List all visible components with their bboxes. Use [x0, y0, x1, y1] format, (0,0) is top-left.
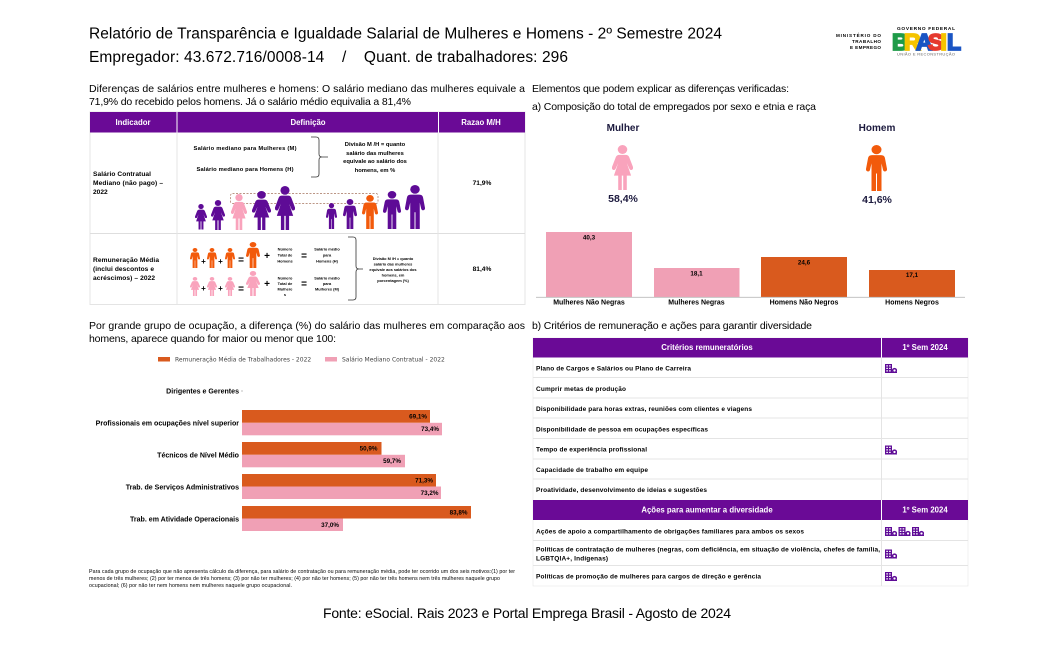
chave e divisão M/H: homens, em — [382, 272, 405, 278]
definição: salário mediano: salário das mulheres — [346, 151, 404, 157]
title: Relatório de Transparência e Igualdade Salarial de Mulheres e Homens - 2º Semestre 2024 — [89, 26, 722, 42]
fórmula: média dos homens: Salário médio — [314, 246, 340, 252]
bar chart: composição por sexo e raça: 40,3 — [583, 234, 596, 242]
fórmula: média dos homens: + — [264, 251, 270, 262]
chave e divisão M/H: salário das mulheres — [374, 262, 412, 266]
rows: critérios — [536, 365, 752, 494]
row label: salário contratual mediano: 2022 — [93, 189, 108, 196]
bars — [242, 410, 471, 531]
logo: ministério e governo federal: S — [928, 29, 943, 55]
text block: diferenças de salários: Diferenças de salários entre mulheres e homens: O salário mediano das mulheres equivale a — [89, 83, 525, 95]
header: ações diversidade: Ações para aumentar a diversidade — [641, 506, 773, 514]
fórmula: média das mulheres — [190, 271, 340, 297]
category labels: Técnicos de Nível Médio — [157, 452, 240, 460]
fórmula: média das mulheres: = — [301, 279, 307, 290]
rows: critérios: Capacidade de trabalho em equipe — [536, 467, 648, 474]
value labels: 73,4% — [421, 426, 439, 433]
rows: critérios: Tempo de experiência profissional — [536, 446, 647, 454]
value labels — [321, 414, 468, 529]
panel: critérios e ações — [533, 338, 968, 586]
table header: Razao M/H — [461, 118, 501, 127]
fórmula: média das mulheres: + — [218, 284, 223, 293]
bar chart: composição por sexo e raça — [536, 232, 965, 306]
rows: critérios: Disponibilidade de pessoa em ocupações específicas — [536, 426, 708, 433]
bar chart: diferença por ocupação — [96, 388, 471, 531]
rows: critérios: Cumprir metas de produção — [536, 386, 626, 393]
row label: remuneração média — [93, 257, 159, 282]
table header: Definição — [290, 118, 326, 127]
logo: ministério e governo federal: MINISTÉRIO DO — [836, 31, 881, 38]
legend: Salário Mediano Contratual - 2022 — [342, 356, 445, 364]
panel: homem 41,6%: 41,6% — [862, 194, 893, 206]
fórmula: média das mulheres: Mulhere — [278, 286, 293, 292]
definição: salário mediano: Salário mediano para Mulheres (M) — [194, 146, 297, 152]
logo: ministério e governo federal: L — [947, 29, 961, 55]
fórmula: média das mulheres: + — [201, 284, 206, 293]
fórmula: média das mulheres: = — [238, 284, 244, 295]
rows: ações: Políticas de promoção de mulheres para cargos de direção e gerência — [536, 574, 761, 580]
panel: mulher 58,4%: Mulher — [607, 123, 639, 134]
rows: critérios: Plano de Cargos e Salários ou Plano de Carreira — [536, 365, 691, 372]
chave e divisão M/H — [348, 237, 417, 300]
text block: diferenças de salários: 71,9% do recebido pelos homens. Já o salário médio equivalia a 81,4% — [89, 96, 411, 108]
fórmula: média dos homens: Homens — [277, 258, 293, 264]
value labels: 69,1% — [409, 414, 427, 420]
definição: salário mediano: Divisão M /H = quanto — [345, 142, 406, 148]
category labels: Profissionais em ocupações nível superior — [96, 420, 239, 428]
fórmula: média das mulheres: + — [264, 279, 270, 290]
value labels: 83,8% — [450, 510, 468, 516]
logo: ministério e governo federal: TRABALHO — [852, 39, 881, 44]
fórmula: média dos homens — [190, 242, 340, 268]
panel: tabela de indicadores — [90, 112, 525, 304]
rows: ações — [536, 528, 880, 580]
logo: ministério e governo federal: E EMPREGO — [850, 45, 881, 50]
logo: ministério e governo federal: R — [904, 29, 921, 55]
header: ações diversidade — [533, 500, 968, 520]
rows: critérios: Disponibilidade para horas extras, reuniões com clientes e viagens — [536, 406, 752, 413]
text block: elementos explicativos: a) Composição do total de empregados por sexo e etnia e raça — [532, 101, 816, 113]
rows: ações: Políticas de contratação de mulheres (negras, com deficiência, em situação de violência, chefes de família, — [536, 546, 880, 554]
bar chart: composição por sexo e raça: Mulheres Negras — [668, 300, 725, 306]
fórmula: média dos homens: Número — [278, 246, 293, 252]
category labels — [96, 388, 240, 524]
logo: ministério e governo federal: GOVERNO FEDERAL — [897, 26, 955, 32]
value labels: 50,9% — [360, 446, 378, 452]
logo: ministério e governo federal: B — [892, 29, 909, 55]
fórmula: média dos homens: Total de — [278, 252, 293, 258]
logo: ministério e governo federal: A — [916, 29, 933, 55]
text block: grande grupo de ocupação: homens, aparece quando for maior ou menor que 100: — [89, 333, 336, 345]
chave e divisão M/H: Divisão M /H = quanto — [373, 256, 414, 261]
bar chart: composição por sexo e raça: Mulheres Não Negras — [553, 300, 625, 306]
value: razão 71,9%: 71,9% — [473, 180, 491, 187]
source: Fonte: eSocial. Rais 2023 e Portal Emprega Brasil - Agosto de 2024 — [323, 605, 731, 621]
bar chart: composição por sexo e raça: Homens Negros — [885, 300, 939, 306]
icons: mediana de mulheres e homens — [195, 185, 425, 230]
rows: critérios: Proatividade, desenvolvimento de ideias e sugestões — [536, 487, 707, 494]
definição: salário mediano: Salário mediano para Homens (H) — [196, 167, 294, 173]
logo: ministério e governo federal — [836, 26, 961, 56]
title — [89, 26, 722, 66]
header: critérios remuneratórios: 1º Sem 2024 — [902, 343, 948, 352]
fórmula: média das mulheres: Total de — [278, 281, 293, 286]
bar chart: composição por sexo e raça: 17,1 — [906, 272, 919, 279]
chave e divisão M/H: equivale aos salários dos — [369, 267, 417, 272]
row label: remuneração média: acréscimos) – 2022 — [93, 275, 155, 282]
value: razão 81,4%: 81,4% — [473, 266, 491, 273]
table header: Indicador — [115, 118, 151, 127]
rows: ações: Ações de apoio a compartilhamento de obrigações familiares para ambos os sexos — [536, 528, 804, 535]
row label: salário contratual mediano — [93, 171, 163, 196]
category labels: Trab. em Atividade Operacionais — [130, 516, 239, 524]
text block: grande grupo de ocupação — [89, 320, 525, 345]
icons: empresa — [885, 364, 924, 581]
footnote: ocupacional; (6) por não ter nem homens nem mulheres naquele grupo ocupacional. — [89, 583, 292, 589]
logo: ministério e governo federal: UNIÃO E RECONSTRUÇÃO — [897, 52, 955, 56]
fórmula: média dos homens: = — [238, 255, 244, 266]
fórmula: média das mulheres: s — [284, 292, 286, 297]
panel: mulher 58,4%: 58,4% — [608, 193, 639, 205]
header: ações diversidade: 1º Sem 2024 — [902, 506, 948, 514]
definição: salário mediano: equivale ao salário dos — [343, 159, 407, 165]
value labels: 59,7% — [383, 458, 401, 465]
fórmula: média dos homens: + — [218, 257, 223, 266]
fórmula: média das mulheres: Número — [278, 276, 293, 280]
header: critérios remuneratórios: Critérios remuneratórios — [661, 343, 753, 352]
category labels: Trab. de Serviços Administrativos — [126, 484, 239, 492]
fórmula: média dos homens: + — [201, 257, 206, 266]
fórmula: média dos homens: = — [301, 251, 307, 262]
value labels: 73,2% — [421, 490, 439, 497]
legend — [158, 356, 445, 364]
chave e divisão M/H: porcentagem (%) — [377, 278, 409, 283]
title: Empregador: 43.672.716/0008-14 / Quant. de trabalhadores: 296 — [89, 49, 568, 66]
category labels: Dirigentes e Gerentes — [166, 388, 239, 396]
bar chart: composição por sexo e raça: 18,1 — [690, 270, 703, 278]
text block: grande grupo de ocupação: Por grande grupo de ocupação, a diferença (%) do salário das mulheres em comparação aos — [89, 320, 525, 332]
row label: remuneração média: (inclui descontos e — [93, 266, 154, 273]
value labels: 71,3% — [415, 478, 433, 484]
panel: homem 41,6% — [859, 123, 895, 206]
panel: mulher 58,4% — [607, 123, 639, 205]
bar chart: composição por sexo e raça: Homens Não Negros — [770, 300, 839, 306]
header: critérios remuneratórios — [533, 338, 968, 358]
text block: diferenças de salários — [89, 83, 525, 108]
panel: homem 41,6%: Homem — [859, 123, 895, 134]
row label: salário contratual mediano: Salário Contratual — [93, 171, 151, 178]
bar chart: composição por sexo e raça: 24,6 — [798, 260, 811, 266]
row label: remuneração média: Remuneração Média — [93, 257, 159, 264]
text block: elementos explicativos: Elementos que podem explicar as diferenças verificadas: — [532, 83, 789, 95]
rows: ações: LGBTQIA+, Indígenas) — [536, 555, 608, 562]
table header — [90, 112, 525, 132]
definição: salário mediano — [194, 137, 407, 177]
fórmula: média das mulheres: Mulheres (M) — [315, 286, 340, 292]
logo: ministério e governo federal: I — [940, 29, 947, 55]
fórmula: média das mulheres: para — [323, 281, 332, 286]
value labels: 37,0% — [321, 522, 339, 529]
fórmula: média dos homens: Homens (H) — [316, 258, 339, 264]
footnote: Para cada grupo de ocupação que não apresenta cálculo da diferença, para salário de contratação ou para remuneração média, pode ter ocorrido um dos seis motivos:(1) por ter — [89, 569, 515, 575]
text block: critérios heading: b) Critérios de remuneração e ações para garantir diversidade — [532, 320, 812, 332]
footnote: menos de três mulheres; (2) por ter menos de três homens; (3) por não ter mulheres; (4) por não ter homens; (5) por não ter três homens nem três mulheres naquele grupo — [89, 576, 500, 582]
legend: Remuneração Média de Trabalhadores - 2022 — [175, 356, 311, 364]
fórmula: média dos homens: para — [323, 252, 332, 258]
row label: salário contratual mediano: Mediano (não pago) – — [93, 180, 163, 187]
footnote — [89, 569, 515, 589]
definição: salário mediano: homens, em % — [355, 168, 395, 174]
fórmula: média das mulheres: Salário médio — [314, 276, 340, 280]
text block: elementos explicativos — [532, 83, 816, 113]
